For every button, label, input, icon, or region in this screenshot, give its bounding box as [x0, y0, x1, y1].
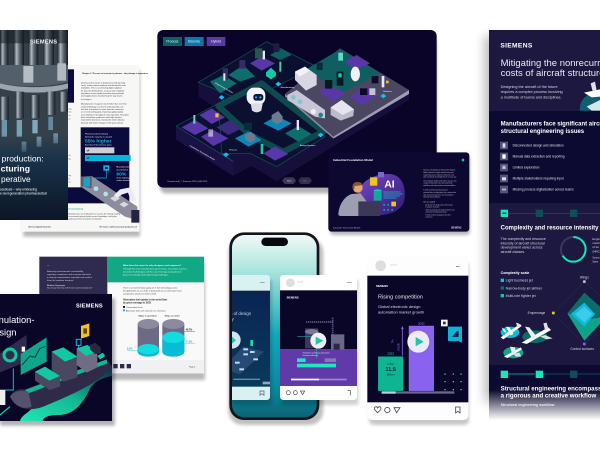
inner page	[20, 65, 139, 232]
play button	[310, 333, 326, 349]
page shadow	[23, 70, 140, 237]
stat text: than that of the previous years	[85, 143, 112, 146]
tabs	[163, 37, 225, 46]
body intro: the global fleet as can order in dedicated use an alternative fuels	[123, 289, 181, 292]
body paragraph: Manufacturers recognize much better than ever that	[81, 103, 127, 106]
cover title	[0, 153, 47, 196]
purple panel chart	[297, 352, 336, 367]
bar 2022: 11.5	[385, 367, 396, 373]
chart legend: Ships on order	[165, 315, 180, 317]
left page text lines: ch	[69, 155, 71, 157]
logo: SIEMENS	[30, 40, 57, 46]
lower content	[501, 210, 600, 407]
right gray platform	[285, 48, 409, 139]
document title	[501, 58, 600, 79]
body intro: There is a transformation going on in fuel technology across	[123, 286, 177, 289]
stat text: demands capacity is around	[85, 135, 113, 138]
bottom section stepper	[501, 371, 600, 378]
bar 2032	[409, 321, 434, 391]
card shadow	[282, 280, 358, 405]
ring side text: of de	[592, 245, 599, 249]
avatar	[286, 278, 295, 287]
card image purple	[280, 349, 357, 386]
card body	[367, 255, 468, 420]
bar 2022: 2022	[387, 352, 394, 356]
complexity paragraph: intensity of aircraft structural	[501, 241, 545, 245]
navigation buttons: Next	[303, 180, 307, 183]
slide body text: It will be used by manufacturing and	[423, 189, 448, 192]
quote text: Rebeca Grynspan	[47, 285, 66, 287]
complexity legend: Multi-role fighter jet	[506, 294, 536, 298]
platform captions: Conductors Foundation Model	[189, 144, 216, 161]
stat text: Pharmaceutical industry	[85, 133, 109, 136]
machine blocks on platforms	[245, 67, 375, 143]
body intro: compared to about one-third in 2023.	[123, 292, 157, 295]
isometric layout	[232, 331, 270, 384]
phone shadow	[228, 238, 323, 425]
card headline	[232, 312, 251, 322]
second stat: of the industry's	[116, 176, 130, 179]
slide body text: Model, tailored to support manufacturing and	[423, 171, 454, 174]
slide body text: Accelerate the design phase from facility	[425, 203, 453, 206]
dot grid	[444, 373, 462, 390]
right social card	[280, 275, 358, 405]
tabs: Hybrid	[211, 40, 221, 44]
ring chart	[561, 237, 586, 262]
body paragraph: data streamlines production and helps leaders	[81, 116, 122, 119]
chart values: 48.7%	[186, 328, 193, 331]
intro text: Designing the aircraft of the future	[501, 85, 558, 89]
logo: SIEMENS	[500, 42, 533, 49]
tabs: Discrete	[188, 40, 200, 44]
second stat: accounts for	[116, 168, 128, 171]
body paragraph: as an overarching goal, improving agility, quality	[81, 111, 123, 114]
footer bar: Page 4	[189, 366, 196, 368]
icon connector	[90, 165, 109, 178]
isometric base side faces	[176, 82, 409, 181]
left page text lines: al	[69, 118, 71, 120]
phone body	[229, 232, 319, 420]
video progress	[291, 379, 347, 380]
issue list	[500, 142, 574, 193]
header avatar	[375, 260, 386, 271]
spread shadow	[42, 262, 205, 380]
bar 2022: USD	[388, 362, 395, 366]
intro text: a multitude of teams and disciplines.	[501, 96, 562, 100]
post logo: SIEMENS	[376, 284, 388, 288]
stat text	[85, 133, 113, 146]
platform captions: Process	[229, 149, 238, 152]
left page text lines: ing	[69, 94, 71, 96]
card headline: ly	[231, 316, 235, 321]
navigation buttons	[282, 177, 312, 184]
header placeholder: siemens	[390, 265, 397, 267]
ring side text: Syste	[592, 260, 599, 263]
body intro	[123, 286, 181, 295]
ship containers	[35, 343, 105, 390]
lower left platform	[176, 103, 265, 162]
post headline: Rising competition	[378, 294, 423, 300]
chart title: by gross tonnage in 2023	[123, 302, 152, 305]
comparison bars: x4	[87, 149, 90, 152]
bar 2022: billion	[387, 373, 395, 377]
slide body text: to product simulation	[425, 206, 439, 209]
radar chart: Wings	[580, 276, 589, 280]
growth arrow: 7%	[390, 339, 394, 343]
footer text: quality outcomes for patients everywhere.	[68, 218, 103, 221]
header text: innovative hull designs and the use of energy saving devices	[123, 270, 183, 273]
complexity paragraph: development varies across	[501, 246, 543, 250]
workflow heading: a rigorous and creative workflow	[501, 393, 597, 400]
video progress	[382, 391, 454, 394]
radar chart	[528, 276, 600, 351]
slide body text: Optimize production through predictive and	[425, 208, 454, 211]
panel background	[157, 30, 437, 188]
slide shadow	[330, 155, 470, 235]
chart values	[127, 328, 195, 351]
stepper one	[501, 210, 600, 217]
green wave	[20, 367, 112, 421]
footer text	[28, 208, 137, 229]
quote text: “	[47, 264, 49, 268]
purple panel chart: Simulation and design automation	[303, 352, 330, 355]
cylinder chart: ships in operation	[138, 319, 159, 357]
slide body text: Siemens is developing an Industrial Foundation	[423, 169, 455, 172]
radar chart: Empennage	[528, 311, 545, 315]
chart values: 6.5%	[127, 348, 133, 350]
ring side text: Source	[592, 257, 600, 260]
logo: SIEMENS	[76, 303, 103, 309]
comparison bars: x7	[87, 158, 90, 160]
platform captions	[189, 82, 393, 161]
cover content	[0, 294, 112, 421]
complexity paragraph	[501, 237, 546, 254]
hero aircraft illustration	[580, 82, 600, 111]
chart title	[123, 299, 167, 305]
card logo: SIEMENS	[287, 295, 299, 299]
quote text: future for maritime transport.	[47, 279, 74, 282]
rotary ring	[0, 63, 68, 93]
slide body text: Unrestricted © Siemens 2025 | HM 2025	[333, 226, 360, 229]
complexity legend: Narrow-body jet airliner	[506, 286, 543, 290]
header dots	[347, 281, 352, 284]
left page text lines: ity	[69, 157, 71, 160]
aircraft illustrations	[501, 323, 553, 358]
chart values: 51.3%	[186, 341, 193, 343]
panel: industrial foundation model slide	[328, 152, 470, 235]
page header text: Chapter 1: The race to innovate in pharma – why change is imperative	[82, 72, 149, 75]
second stat: 60%	[116, 171, 127, 177]
document background sections	[489, 30, 600, 420]
dark gradient overlay	[0, 30, 68, 220]
issue list: Multiple stakeholders requiring input	[513, 176, 564, 180]
intro text	[501, 85, 563, 100]
spread page	[39, 257, 204, 373]
panel: aircraft structure infographic	[478, 30, 600, 420]
conveyor illustration	[81, 176, 139, 223]
footer text: The future of pharmaceutical production | 3	[99, 226, 137, 229]
dark stat panel	[81, 127, 129, 203]
left page text lines: ng	[69, 175, 71, 177]
card body	[280, 275, 357, 400]
crane graphic	[306, 318, 334, 349]
footer text: Siemens Digital Industries	[28, 226, 51, 229]
quote text	[47, 264, 93, 290]
slide body text	[333, 169, 457, 229]
complexity legend	[501, 271, 543, 298]
body paragraph: to change it.	[81, 98, 92, 101]
growth arrow	[390, 326, 404, 356]
purple panel chart: increases efficiency	[303, 354, 318, 357]
left page text lines: es	[69, 182, 71, 184]
radar chart: Control surfaces	[570, 347, 594, 351]
platform captions: Manufacturing	[281, 86, 295, 89]
panel: pharmaceutical report spread	[20, 65, 149, 237]
complexity paragraph: The complexity and resource	[501, 237, 546, 241]
card image dark	[280, 290, 357, 349]
illustration: AI with person	[338, 172, 405, 216]
phone screen	[232, 235, 317, 417]
second stat: Manufacturing	[116, 165, 131, 168]
middle platform	[218, 82, 325, 167]
top left platform	[198, 42, 317, 102]
quote text: regulatory compliance and economic demands	[47, 273, 91, 276]
slide body text: data built into foundation.	[423, 196, 441, 199]
panel shadow	[160, 37, 437, 193]
chart legend: Ships in operation	[138, 314, 158, 317]
body paragraph: using technology is central to reducing total cost	[81, 105, 124, 108]
slide logo: SIEMENS	[451, 227, 462, 229]
body paragraph	[81, 81, 130, 124]
header text: poses new design and engineering challenges.	[123, 273, 169, 276]
ring side text: (NRC	[592, 249, 600, 253]
bar 2032: 2032	[418, 321, 425, 325]
slide body text: workflows and context-aware recommendations	[423, 184, 456, 187]
post image	[367, 276, 468, 402]
body paragraph: make better decisions, moving the whole industry	[81, 119, 124, 122]
body paragraph: operations across global manufacturing networks	[81, 92, 124, 95]
floor tiles	[182, 48, 378, 161]
issue list: Manual data extraction and reporting	[513, 154, 565, 158]
issue list: Limited exploration	[513, 165, 540, 169]
body paragraph: forward, with faster changes in the years ahead.	[81, 121, 124, 124]
cover title: cturing	[1, 163, 30, 173]
bar 2022	[378, 352, 403, 391]
cover title: production:	[2, 153, 44, 163]
slide title: Industrial Foundation Model	[333, 158, 373, 162]
quote text: Secretary General, UN Trade and Development*	[47, 287, 93, 290]
panel: pharmaceutical report cover	[0, 30, 68, 220]
cover photo background	[0, 30, 68, 190]
post subhead	[378, 304, 424, 315]
quote block	[39, 257, 107, 297]
navigation buttons: Back	[287, 181, 292, 183]
issue list: Missing process digitalization across teams	[513, 187, 574, 191]
cover title: perative	[1, 174, 31, 184]
footer text: al manufacturing	[68, 208, 83, 211]
slide background	[328, 152, 469, 232]
illustration: AI with person: AI	[384, 180, 395, 191]
robot mascot	[247, 88, 265, 112]
teal header	[107, 257, 204, 282]
section heading	[501, 122, 600, 135]
left social card	[232, 275, 274, 406]
cylinder chart: ships on order	[162, 319, 184, 357]
stat text: 55% higher	[85, 138, 112, 144]
chart legend: Alternative fuels with reduced CO₂ emissions	[126, 309, 166, 312]
header text	[123, 264, 188, 276]
action icons	[374, 407, 460, 413]
panel: social video post	[367, 255, 469, 425]
footer bar	[107, 360, 204, 373]
second stat: carbon emissions	[116, 179, 132, 182]
header text: What does this mean for ship designers and engineers?	[123, 264, 182, 267]
left page text lines	[69, 94, 72, 184]
cover title	[0, 315, 34, 337]
quote text: in ship by computational, reputable and resilient	[47, 276, 92, 279]
footer note: Unrestricted | © Siemens 2025 | HM 2025	[167, 180, 208, 183]
quote text: Balancing environmental sustainability,	[47, 270, 84, 273]
slide body text: assistance	[425, 216, 433, 219]
panel: ship design report spread	[39, 257, 205, 380]
workflow subheading: Structural engineering workflow	[501, 403, 555, 407]
body paragraph: modalities. This is accelerating digital adoption	[81, 87, 122, 90]
left page text lines: ers	[69, 111, 71, 114]
body paragraph: costs, shorter patent windows and demand for new	[81, 84, 126, 87]
issue list: Disconnected design and simulation	[513, 143, 564, 147]
tabs: Process	[166, 40, 179, 44]
machine graphic	[297, 328, 344, 358]
chart title: Alternative fuel uptake in the world fleet	[123, 299, 167, 302]
bookmark icon	[260, 391, 264, 395]
panel: phone with social cards	[223, 232, 358, 425]
header text: Through the move toward future power trains, new power sources,	[123, 267, 188, 270]
cover background	[0, 294, 112, 421]
body paragraph: and risk. Investment in smart factories continues	[81, 108, 123, 111]
card shadow	[232, 280, 272, 405]
intro text: requires a complex process involving	[501, 90, 563, 94]
chart legend: Conventional fuels	[126, 306, 142, 309]
status dot	[462, 159, 464, 161]
platform captions: Energy Systems	[300, 144, 316, 147]
card action icons	[286, 391, 350, 395]
upper machine columns	[0, 30, 68, 65]
body paragraph: and supply chains, transforming the way teams	[81, 95, 122, 98]
header dots	[260, 281, 265, 284]
slide body text: engineering across industrial enterprises, with	[423, 173, 454, 176]
left page text lines: ers	[69, 97, 71, 100]
card headline: n of design	[230, 311, 252, 316]
card body	[232, 275, 270, 400]
body paragraph: pharmaceutical sector is being pressured by rising	[81, 81, 125, 84]
left page text lines: ing	[69, 108, 71, 110]
upper content	[500, 42, 600, 193]
document shadow	[484, 36, 600, 406]
slide body text: Provide workers language and in-time	[425, 213, 451, 216]
complexity legend: Complexity scale	[501, 271, 529, 275]
chip icon	[441, 320, 448, 326]
slide body text: data and actual experience and trusted plant	[423, 193, 454, 196]
ship hull	[10, 359, 112, 409]
left page text lines: ce	[69, 115, 72, 117]
second stat	[116, 165, 132, 182]
play button	[407, 331, 429, 353]
post subhead: automation market growth	[378, 310, 424, 315]
slide body text: data and domain knowledge built in at every step.	[423, 176, 457, 179]
floating data panels	[0, 323, 89, 415]
complexity legend: Light business jet	[506, 279, 533, 283]
platform captions: Robotics	[383, 90, 393, 93]
panel: ship simulation report cover	[0, 294, 115, 426]
body paragraph: and compliance throughout every operation. Real-time	[81, 113, 130, 116]
footer text: to increased capacity, better process knowledge, and higher	[68, 215, 117, 218]
chart legend	[123, 306, 180, 317]
header menu: •••	[456, 264, 460, 268]
ring side text: could	[592, 241, 600, 245]
footer text: Manufacturers are challenged to act across the industry, leading	[68, 212, 120, 215]
platform captions: Engineering Systems	[214, 82, 234, 95]
speech icon	[448, 327, 462, 343]
workflow heading	[501, 385, 600, 400]
left page text lines: ls	[69, 178, 70, 180]
panel lower extension	[68, 187, 81, 203]
lower filling needles and vials	[0, 92, 68, 152]
slide body text: automated scheduling decisions	[425, 211, 447, 214]
slide body text: The foundation model will be able to process and	[423, 179, 456, 182]
complexity paragraph: aircraft classes.	[501, 250, 525, 254]
slide body text: analyze all industrial scale data and provide	[423, 182, 453, 185]
card shadow	[369, 262, 469, 425]
cover title: ceuticals – why embracing	[0, 188, 37, 192]
slide body text: How you apply AI:	[423, 200, 436, 203]
left page text lines: nd	[69, 101, 71, 103]
cover title: e next-generation pharmaceutical	[0, 192, 47, 196]
card image	[232, 291, 270, 387]
panel: interactive process map	[157, 30, 437, 193]
name placeholder: siemens	[297, 281, 304, 283]
left page dark strip	[68, 69, 74, 103]
post subhead: Global electronic design	[378, 304, 421, 309]
bottom fade	[478, 390, 600, 420]
slide body text: industrial data, including plant, line, and machine	[423, 191, 456, 194]
complexity heading: Complexity and resource intensity	[501, 225, 599, 231]
growth arrow: CAGR	[397, 343, 401, 351]
small screens and figures	[193, 43, 389, 154]
cover shadow	[0, 298, 115, 426]
body paragraph: for process development, scale-up and compliant	[81, 89, 125, 92]
dynamic island	[261, 238, 288, 246]
ring side text	[592, 237, 600, 263]
section heading: structural engineering issues	[501, 129, 585, 135]
teal path ring	[218, 83, 323, 152]
comparison bars	[85, 147, 131, 161]
location markers	[219, 82, 386, 157]
